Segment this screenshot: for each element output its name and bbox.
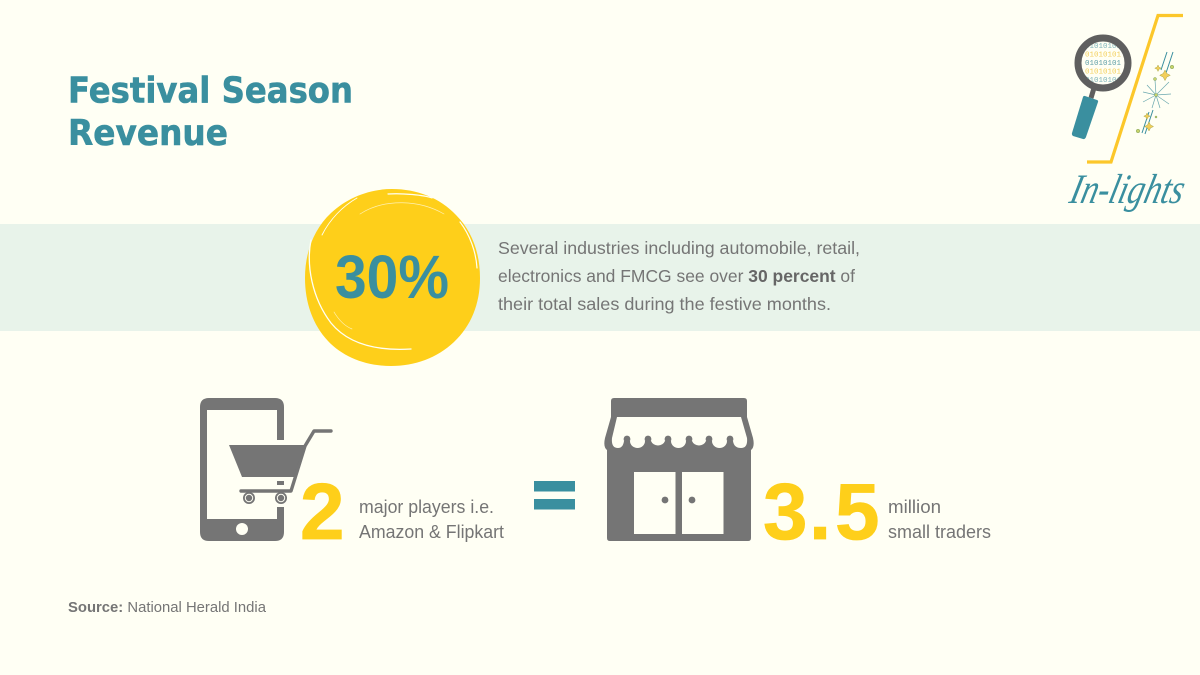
source note: Source: National Herald India <box>68 600 267 616</box>
icon: magnifying glass: 01010101 <box>1085 68 1121 76</box>
icon: magnifying glass: 01010101 <box>1085 52 1121 60</box>
stat: 3.5 million small traders: 3.5 <box>763 467 880 556</box>
title: Festival Season <box>68 70 353 112</box>
title: Revenue <box>68 113 228 154</box>
badge: 30 percent <box>305 189 480 366</box>
description text: Several industries including automobile, retail, <box>498 238 860 258</box>
logo: In-lights <box>1065 16 1190 213</box>
stat: 3.5 million small traders: million <box>888 497 941 517</box>
description text <box>498 238 860 314</box>
description text: electronics and FMCG see over 30 percent of <box>498 266 855 286</box>
icon: storefront <box>604 398 754 541</box>
icon: sparkles <box>1136 52 1174 134</box>
logo slash <box>1087 16 1183 162</box>
icon: phone with shopping cart <box>200 398 331 541</box>
icon: magnifying glass <box>1072 38 1128 139</box>
icon: magnifying glass: 01010101 <box>1085 43 1121 51</box>
stat: 2 major players: 2 <box>300 467 344 556</box>
badge value: 30% <box>335 243 449 311</box>
stat: 2 major players <box>300 467 504 556</box>
icon: magnifying glass: 01010101 <box>1085 77 1121 85</box>
equals sign <box>534 481 575 510</box>
stat: 3.5 million small traders <box>763 467 991 556</box>
stat: 3.5 million small traders: small traders <box>888 522 991 542</box>
stat: 2 major players: Amazon & Flipkart <box>359 522 504 542</box>
stat: 2 major players: major players i.e. <box>359 497 494 517</box>
description text: their total sales during the festive months. <box>498 294 831 314</box>
title <box>68 70 353 154</box>
highlight band <box>0 224 1200 331</box>
icon: magnifying glass: 01010101 <box>1085 60 1121 68</box>
